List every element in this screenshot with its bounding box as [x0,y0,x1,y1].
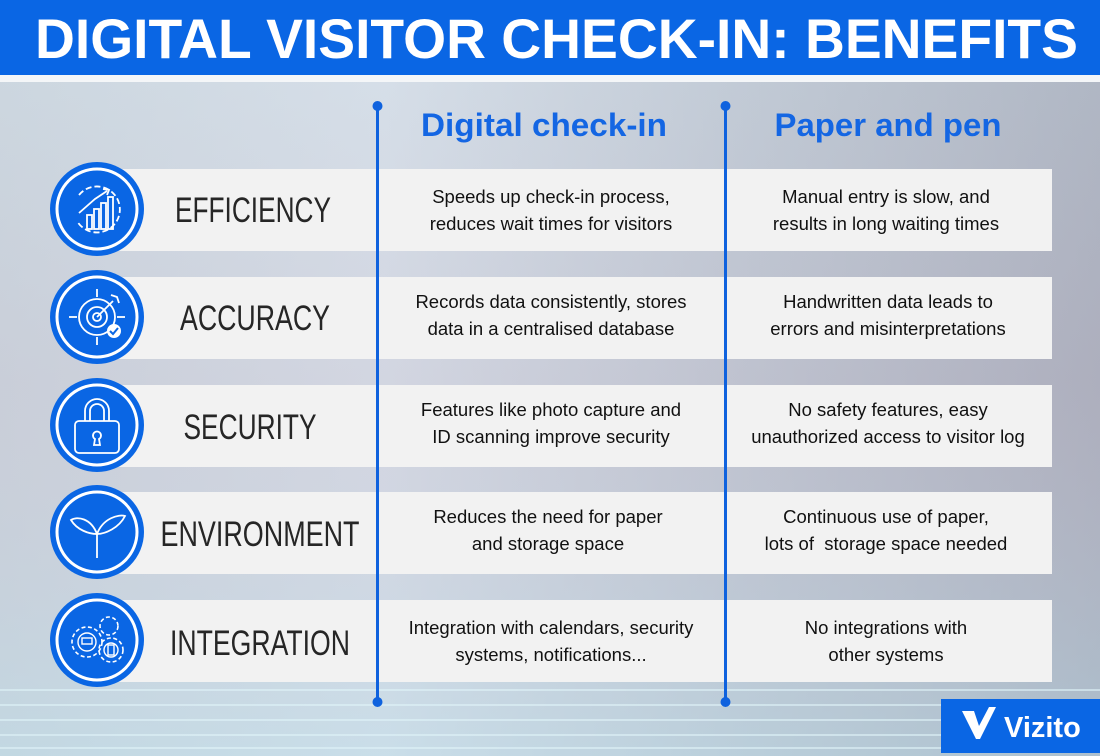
row: integration: other systems [828,644,944,665]
row: efficiency: EFFICIENCY [175,191,331,230]
row: environment: ENVIRONMENT [160,515,360,554]
row: integration: systems, notifications... [455,644,647,665]
row: efficiency [100,169,1052,251]
row: accuracy: Handwritten data leads to [783,291,993,312]
row: environment: lots of storage space needed [765,533,1007,554]
row: accuracy [100,277,1052,359]
row: integration: Integration with calendars, security [409,617,694,638]
title bar: DIGITAL VISITOR CHECK-IN: BENEFITS [35,7,1078,70]
row: security [100,385,1052,467]
row: efficiency: results in long waiting times [773,213,999,234]
column header: paper: Paper and pen [774,107,1002,143]
row: environment: Reduces the need for paper [433,506,663,527]
column header: digital: Digital check-in [421,107,667,143]
row: security: No safety features, easy [788,399,988,420]
row: accuracy: Records data consistently, stores [415,291,687,312]
row: security: ID scanning improve security [432,426,671,447]
divider line: right [720,101,730,707]
row: integration [100,600,1052,682]
icon: integration gears [50,593,144,687]
logo: Vizito [941,699,1100,753]
row: efficiency: Speeds up check-in process, [432,186,670,207]
icon: environment sprout [50,485,144,579]
row: security: SECURITY [184,408,316,447]
row: security: Features like photo capture and [421,399,681,420]
row: accuracy: ACCURACY [180,299,330,338]
row: environment: and storage space [472,533,624,554]
row: security: unauthorized access to visitor log [751,426,1025,447]
divider line: left [372,101,382,707]
row: environment [100,492,1052,574]
icon: security padlock [50,378,144,472]
row: integration: No integrations with [805,617,967,638]
row: accuracy: errors and misinterpretations [770,318,1006,339]
icon: efficiency gear chart [50,162,144,256]
row: environment: Continuous use of paper, [783,506,989,527]
row: integration: INTEGRATION [170,624,350,663]
logo: Vizito: Vizito [1004,712,1081,744]
icon: accuracy target [50,270,144,364]
row: efficiency: reduces wait times for visitors [430,213,672,234]
row: efficiency: Manual entry is slow, and [782,186,990,207]
row: accuracy: data in a centralised database [428,318,674,339]
